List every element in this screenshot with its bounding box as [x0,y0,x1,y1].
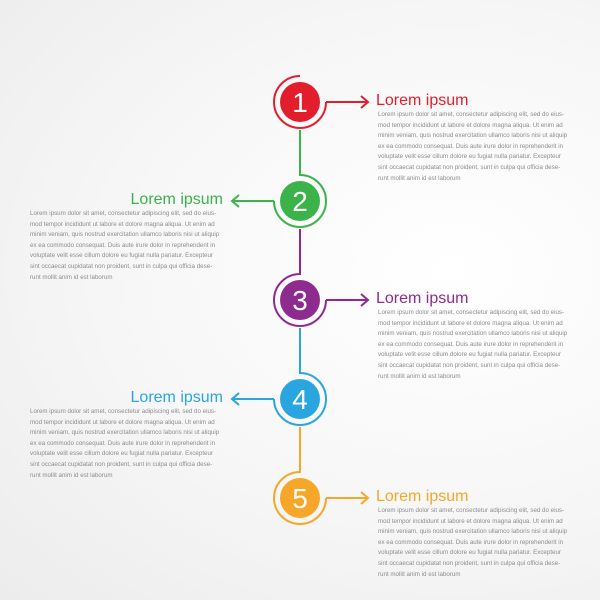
body 1 [378,111,567,182]
step 4 node: 4 [292,384,308,415]
body 2: Lorem ipsum dolor sit amet, consectetur adipiscing elit, sed do eius- [30,210,216,217]
body 1: ex ea commodo consequat. Duis aute irure dolor in reprehenderit in [378,143,563,150]
body 1: voluptate velit esse cillum dolore eu fugiat nulla pariatur. Excepteur [378,153,561,160]
step 2 node [232,130,326,227]
step 2 node: 2 [292,186,308,217]
step 3 node: 3 [292,285,308,316]
step 5 node: 5 [292,483,308,514]
body 3: ex ea commodo consequat. Duis aute irure dolor in reprehenderit in [378,341,563,348]
body 1: Lorem ipsum dolor sit amet, consectetur adipiscing elit, sed do eius- [378,111,564,118]
body 3: mod tempor incididunt ut labore et dolore magna aliqua. Ut enim ad [378,320,563,327]
body 3: Lorem ipsum dolor sit amet, consectetur adipiscing elit, sed do eius- [378,309,564,316]
body 4: minim veniam, quis nostrud exercitation ullamco laboris nisi ut aliquip [30,429,219,436]
body 4: runt mollit anim id est laborum [30,472,113,479]
body 2: minim veniam, quis nostrud exercitation ullamco laboris nisi ut aliquip [30,231,219,238]
body 5: mod tempor incididunt ut labore et dolore magna aliqua. Ut enim ad [378,518,563,525]
step 4 node [232,328,326,425]
body 4 [30,408,219,479]
body 4: mod tempor incididunt ut labore et dolore magna aliqua. Ut enim ad [30,419,215,426]
body 1: mod tempor incididunt ut labore et dolore magna aliqua. Ut enim ad [378,122,563,129]
body 3: minim veniam, quis nostrud exercitation ullamco laboris nisi ut aliquip [378,330,567,337]
step 3 node [274,229,368,326]
body 3 [378,309,567,380]
body 1: runt mollit anim id est laborum [378,175,461,182]
body 3: runt mollit anim id est laborum [378,373,461,380]
body 5: runt mollit anim id est laborum [378,571,461,578]
body 2: voluptate velit esse cillum dolore eu fugiat nulla pariatur. Excepteur [30,252,213,259]
title 4: Lorem ipsum [131,389,223,406]
body 5 [378,507,567,578]
body 2: ex ea commodo consequat. Duis aute irure dolor in reprehenderit in [30,242,215,249]
body 2: mod tempor incididunt ut labore et dolore magna aliqua. Ut enim ad [30,221,215,228]
body 5: ex ea commodo consequat. Duis aute irure dolor in reprehenderit in [378,539,563,546]
body 2 [30,210,219,281]
body 1: minim veniam, quis nostrud exercitation ullamco laboris nisi ut aliquip [378,132,567,139]
body 5: minim veniam, quis nostrud exercitation ullamco laboris nisi ut aliquip [378,528,567,535]
title 3: Lorem ipsum [376,290,468,307]
body 3: sint occaecat cupidatat non proident, sunt in culpa qui officia dese- [378,362,560,369]
body 4: Lorem ipsum dolor sit amet, consectetur adipiscing elit, sed do eius- [30,408,216,415]
title 2: Lorem ipsum [131,191,223,208]
body 2: sint occaecat cupidatat non proident, sunt in culpa qui officia dese- [30,263,212,270]
body 1: sint occaecat cupidatat non proident, sunt in culpa qui officia dese- [378,164,560,171]
step 5 node [274,427,368,524]
body 5: sint occaecat cupidatat non proident, sunt in culpa qui officia dese- [378,560,560,567]
body 3: voluptate velit esse cillum dolore eu fugiat nulla pariatur. Excepteur [378,351,561,358]
body 4: voluptate velit esse cillum dolore eu fugiat nulla pariatur. Excepteur [30,450,213,457]
step 1 node: 1 [292,87,308,118]
body 2: runt mollit anim id est laborum [30,274,113,281]
step 1 node [274,76,368,128]
body 5: voluptate velit esse cillum dolore eu fugiat nulla pariatur. Excepteur [378,549,561,556]
body 4: ex ea commodo consequat. Duis aute irure dolor in reprehenderit in [30,440,215,447]
body 4: sint occaecat cupidatat non proident, sunt in culpa qui officia dese- [30,461,212,468]
body 5: Lorem ipsum dolor sit amet, consectetur adipiscing elit, sed do eius- [378,507,564,514]
title 1: Lorem ipsum [376,92,468,109]
title 5: Lorem ipsum [376,488,468,505]
